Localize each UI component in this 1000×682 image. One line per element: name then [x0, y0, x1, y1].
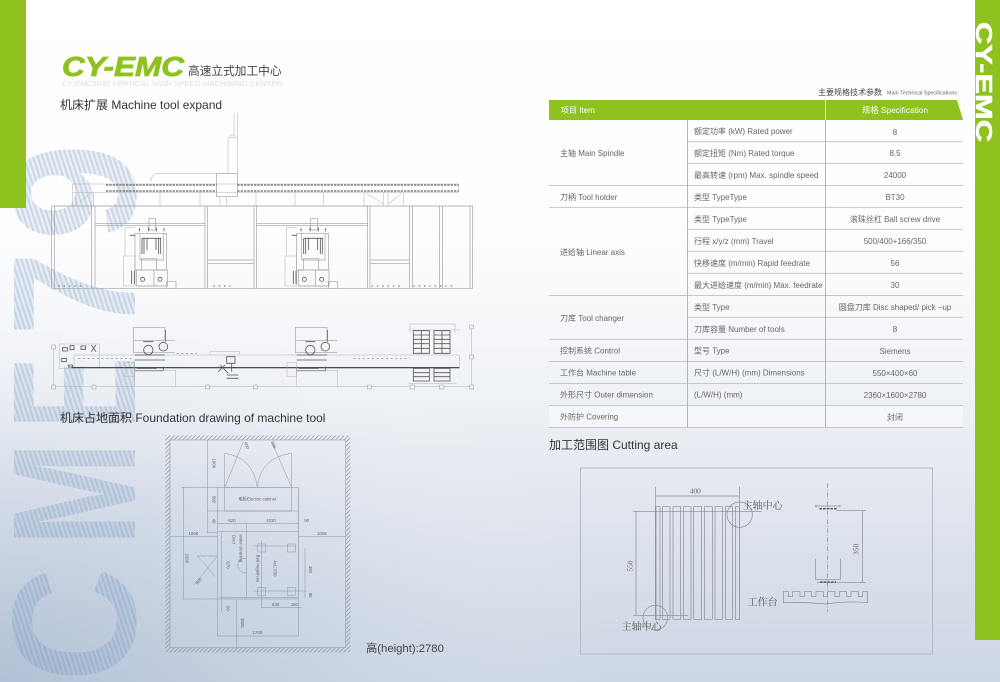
covering row shading: [549, 406, 963, 428]
gantry carriage: [217, 173, 237, 197]
rail supports: [76, 193, 403, 206]
label spindle centre bottom: 主轴中心: [622, 620, 663, 633]
first column: 外形尺寸 Outer dimension: [560, 390, 653, 400]
specification values: [839, 128, 952, 422]
dimension values: 40: [211, 519, 216, 524]
specification table caption: [818, 87, 958, 97]
specification table: [549, 100, 963, 428]
second column: 最高转速 (rpm) Max. spindle speed: [694, 170, 818, 180]
second column: 类型 TypeType: [694, 214, 747, 224]
table rules: [549, 142, 963, 427]
dimension lines: [170, 440, 346, 648]
height note: 高(height):2780: [366, 641, 444, 655]
control boxes: [62, 345, 96, 367]
dimension values: 620: [228, 518, 236, 523]
dimension values: 4xC7/30: [272, 560, 277, 577]
dimension values: 90: [304, 518, 310, 523]
dimension values: 900: [270, 440, 277, 449]
dimension labels: [52, 325, 474, 389]
swing doors: [225, 442, 292, 487]
specification values: 8.5: [889, 149, 901, 158]
specification values: 圆盘刀库 Disc shaped/ pick –up: [839, 302, 952, 312]
right green band with model name: [971, 0, 1000, 640]
working range side view: [748, 483, 868, 612]
label spindle centre top: 主轴中心: [743, 499, 784, 512]
label worktable: 工作台: [748, 595, 778, 608]
heading: foundation drawing: 机床占地面积 Foundation drawing of machine tool: [60, 410, 325, 425]
dimension lines: [52, 324, 473, 387]
side door: [194, 556, 217, 585]
dimension values: 500: [211, 496, 216, 504]
dimension values: 1000: [240, 618, 245, 628]
safety frame: [52, 206, 473, 288]
specification values: 8: [893, 325, 898, 334]
first column: 工作台 Machine table: [560, 368, 637, 378]
gantry column: [228, 113, 237, 173]
first column: 控制系统 Control: [560, 346, 620, 356]
dimension values: 1700: [253, 630, 263, 635]
dimension values: 360: [308, 566, 313, 574]
box outline: [580, 468, 932, 654]
coolant circle: [238, 558, 247, 573]
tool magazines: [408, 330, 460, 383]
title block: [62, 51, 283, 88]
second column: 快移速度 (m/min) Rapid feedrate: [694, 258, 811, 268]
hatched wall: [168, 438, 348, 650]
drawing: machine plan view: [52, 324, 474, 389]
model name: CY-EMC: [62, 51, 185, 82]
drawing: machine elevation: [52, 113, 473, 288]
dimension values: 1008: [317, 531, 327, 536]
specification values: 2360×1600×2780: [864, 391, 927, 400]
long bed: [59, 344, 459, 368]
cable hose: [151, 173, 217, 182]
centre head: [210, 352, 239, 378]
specification values: 8: [893, 128, 898, 137]
dimension values: 1000: [211, 459, 216, 469]
specification values: 550×400×60: [873, 369, 918, 378]
dimension values: 50: [226, 606, 231, 611]
dimension values: 1008: [189, 531, 199, 536]
electric cabinet: [225, 487, 291, 511]
specification values: 24000: [884, 171, 907, 180]
left green band: [0, 0, 26, 208]
table header: 规格 Specification: [862, 105, 928, 115]
dimension 400: 400: [690, 486, 701, 495]
second column: (L/W/H) (mm): [694, 390, 743, 400]
second column: 额定扭矩 (Nm) Rated torque: [694, 148, 795, 158]
dimension values: 630: [272, 602, 280, 607]
first column: 进给轴 Linear axis: [560, 247, 625, 257]
dimension values: [185, 440, 327, 635]
first column: 刀库 Tool changer: [560, 313, 624, 323]
second column: 类型 Type: [694, 302, 730, 312]
dimension values: 670: [226, 561, 231, 569]
dimension values: Bed negatives: [256, 555, 261, 582]
dimension values: 2360: [185, 554, 190, 564]
first column: 刀柄 Tool holder: [560, 192, 618, 202]
cabinet label: 电柜Electric cabinet: [238, 496, 277, 503]
machine 1: [123, 218, 176, 288]
dimension values: 90: [308, 593, 313, 598]
heading: machine tool expand: 机床扩展 Machine tool expand: [60, 98, 222, 112]
drawing: cutting area box: [580, 468, 932, 654]
specification values: 封闭: [887, 412, 903, 422]
specification table caption: Main Technical Specifications: [887, 90, 958, 96]
watermark: large hatched model name: [0, 143, 173, 682]
second column: 尺寸 (L/W/H) (mm) Dimensions: [694, 368, 805, 378]
dimension values: 900: [195, 576, 203, 585]
first column: [560, 148, 653, 422]
second column: 额定功率 (kW) Rated power: [694, 126, 793, 136]
table header: [549, 100, 963, 120]
first column: 主轴 Main Spindle: [560, 148, 625, 158]
dimension values: 1030: [266, 518, 276, 523]
second column: 刀库容量 Number of tools: [694, 324, 785, 334]
second column: [694, 126, 823, 400]
heading: cutting area: 加工范围图 Cutting area: [549, 438, 678, 452]
specification values: 滚珠丝杠 Ball screw drive: [850, 214, 941, 224]
specification values: 30: [891, 281, 900, 290]
second column: 行程 x/y/z (mm) Travel: [694, 236, 774, 246]
dimension values: water cleaning: [238, 534, 243, 563]
machine 1 top: [125, 327, 176, 387]
working range plan: [622, 486, 784, 633]
drawing: foundation plan: [168, 438, 348, 650]
worktable profile: [783, 592, 868, 604]
specification values: 56: [891, 259, 900, 268]
dimension values: 150: [291, 602, 299, 607]
anchor squares: [258, 544, 295, 595]
second column: 类型 TypeType: [694, 192, 747, 202]
dimension values: Duct: [231, 535, 236, 545]
specification values: BT30: [885, 193, 905, 202]
second column: 最大进给速度 (m/min) Max. feedrate: [694, 280, 823, 290]
machine footprint: [182, 487, 298, 636]
dimension values: 900: [243, 441, 251, 450]
dimension 550: 550: [625, 560, 634, 571]
Chinese title: 高速立式加工中心: [188, 64, 282, 78]
gantry rails: [73, 184, 459, 205]
first column: 外防护 Covering: [560, 412, 618, 422]
specification values: Siemens: [879, 347, 911, 356]
machine 2: [285, 218, 338, 288]
dimension 350: 350: [852, 544, 861, 555]
specification values: 500/400+166/350: [864, 237, 927, 246]
second column: 型号 Type: [694, 346, 730, 356]
English subtitle: CY-EMC5040 VERTICAL HIGH SPEED MACHINING CENTER: [62, 79, 283, 88]
table header: 项目 Item: [561, 106, 595, 115]
vertical model name: CY-EMC: [971, 22, 997, 142]
specification table caption: 主要规格技术参数: [818, 87, 882, 97]
machine 2 top: [287, 327, 338, 387]
